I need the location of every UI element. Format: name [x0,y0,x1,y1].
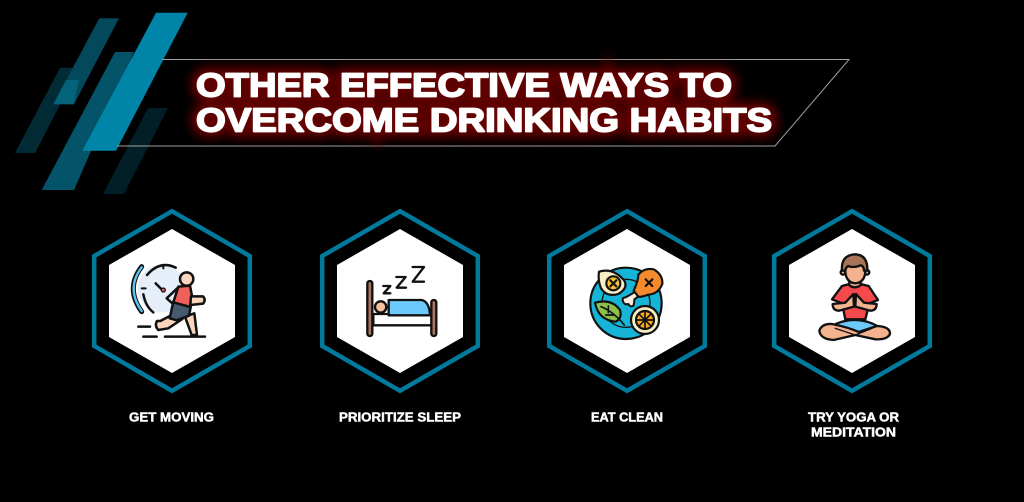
icon: person sleeping in bed [367,267,436,336]
hexagon: prioritize sleep [322,211,478,391]
icon: person meditating [819,254,890,340]
panel: eat clean [549,211,705,391]
panel: try yoga or meditation [774,211,930,391]
title [196,68,772,140]
label: try yoga or meditation: MEDITATION [811,426,896,440]
label: try yoga or meditation: TRY YOGA OR [808,410,899,424]
label: get moving: GET MOVING [129,410,214,424]
hexagon: get moving [94,211,250,391]
label: prioritize sleep: PRIORITIZE SLEEP [339,410,461,424]
decorative diagonal stripes [15,13,188,194]
label: try yoga or meditation [808,410,899,440]
title glow [196,68,772,140]
hexagon: yoga [774,211,930,391]
title: OTHER EFFECTIVE WAYS TO [196,68,732,104]
title glow: OVERCOME DRINKING HABITS [196,102,772,140]
title: OVERCOME DRINKING HABITS [196,102,772,140]
title glow: OVERCOME DRINKING HABITS [196,102,772,140]
icon: plate of healthy food [590,268,662,339]
title glow: OTHER EFFECTIVE WAYS TO [196,68,732,104]
title glow: OTHER EFFECTIVE WAYS TO [196,68,732,104]
hexagon: eat clean [549,211,705,391]
label: eat clean: EAT CLEAN [591,410,663,424]
title banner frame [117,60,849,146]
panel: get moving [94,211,250,391]
icon: runner and stopwatch [133,264,205,337]
panel: prioritize sleep [322,211,478,391]
